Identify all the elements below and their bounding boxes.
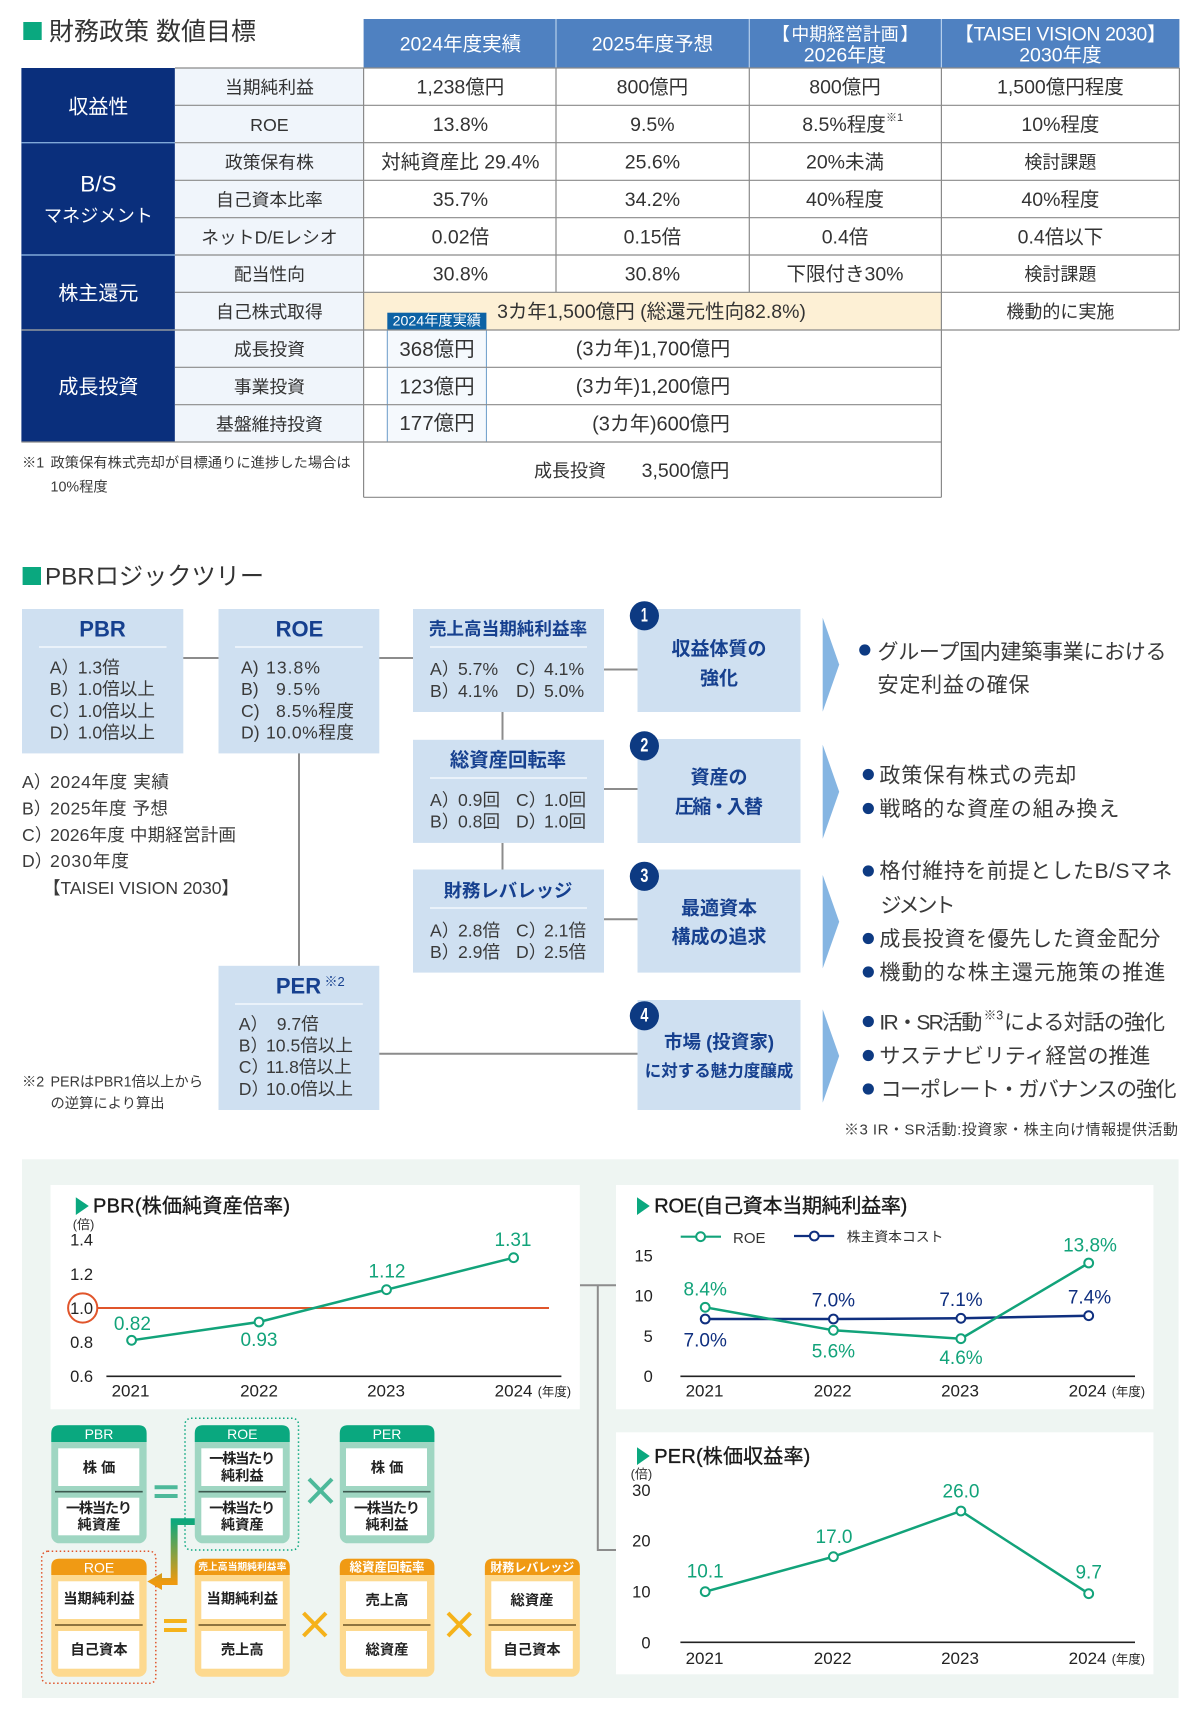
box: PER: B） bbox=[239, 1036, 268, 1056]
footnote ※2 bbox=[22, 1074, 203, 1112]
box: ROE: B) bbox=[241, 679, 259, 699]
table header: 【 bbox=[772, 24, 790, 44]
chart: PER: 17.0 bbox=[816, 1527, 852, 1548]
chart: PBR: 0.6 bbox=[70, 1368, 93, 1386]
legend: scenario key: 2024年度 実績 bbox=[50, 772, 169, 792]
chart: PER: (年度) bbox=[1112, 1652, 1145, 1667]
box: 総資産回転率 bbox=[413, 740, 604, 843]
arrow 1 bbox=[823, 618, 839, 712]
chart: ROE: 10 bbox=[634, 1288, 653, 1306]
footnote ※3: ※3 IR・SR活動:投資家・株主向け情報提供活動 bbox=[844, 1122, 1178, 1138]
formula card: 売上高当期純利益率 bbox=[195, 1559, 290, 1677]
box: PER: PER bbox=[276, 974, 321, 998]
box: 総資産回転率: D） bbox=[516, 812, 546, 832]
legend: scenario key: D） bbox=[22, 851, 52, 871]
box: ROE: 13.8% bbox=[266, 658, 320, 678]
box: 売上高当期純利益率: 4.1% bbox=[458, 681, 498, 701]
formula card: PER: 純利益 bbox=[366, 1516, 409, 1534]
table values: 3,500億円 bbox=[642, 460, 729, 482]
share buyback highlight cell bbox=[364, 292, 941, 330]
legend: scenario key: B） bbox=[22, 798, 51, 818]
box: PER: D） bbox=[239, 1079, 269, 1099]
table header: 2025年度予想 bbox=[592, 33, 713, 55]
chart: ROE: 2022 bbox=[814, 1382, 852, 1400]
chart: ROE: 7.0% bbox=[684, 1330, 727, 1352]
box: PBR: D） bbox=[50, 723, 80, 743]
table values: 20%未満 bbox=[806, 152, 884, 174]
table values: 10%程度 bbox=[1021, 114, 1099, 136]
formula card: 売上高当期純利益率: 売上高 bbox=[221, 1642, 264, 1658]
action box 2: 資産の bbox=[690, 766, 748, 788]
operator: times green bbox=[309, 1479, 332, 1502]
formula card: ROE (EPS / BPS): 純資産 bbox=[221, 1516, 264, 1534]
FY2024 actual investment column: 123億円 bbox=[399, 376, 475, 398]
table values: 1,500億円程度 bbox=[997, 77, 1124, 99]
table values: (3カ年)1,700億円 bbox=[576, 338, 730, 361]
table values: (3カ年)600億円 bbox=[592, 412, 730, 435]
table header: 2024年度実績 bbox=[400, 33, 521, 55]
table category column: 株主還元 bbox=[58, 282, 138, 305]
table category column: マネジメント bbox=[44, 206, 153, 226]
table values: 13.8% bbox=[433, 114, 488, 136]
box: PER: 9.7倍 bbox=[277, 1014, 319, 1034]
table metric labels bbox=[175, 68, 364, 442]
chart: PER bbox=[616, 1432, 1153, 1674]
chart: PBR: 0.93 bbox=[241, 1330, 277, 1351]
box: 売上高当期純利益率: C） bbox=[516, 659, 546, 679]
action box 3: 最適資本 bbox=[681, 897, 757, 919]
chart: PER: 10 bbox=[632, 1583, 650, 1601]
box: 総資産回転率: A） bbox=[430, 790, 459, 810]
box: PER: C） bbox=[239, 1057, 269, 1077]
chart: ROE: 0 bbox=[644, 1368, 653, 1386]
box: PBR: C） bbox=[50, 701, 80, 721]
legend: scenario key: C） bbox=[22, 825, 52, 845]
table values: 0.4倍 bbox=[822, 226, 868, 248]
legend: scenario key: 2025年度 予想 bbox=[50, 798, 168, 818]
box: 総資産回転率: 0.9回 bbox=[458, 790, 500, 810]
box: 財務レバレッジ: D） bbox=[516, 942, 546, 962]
legend: scenario key bbox=[22, 772, 239, 898]
box: 財務レバレッジ: 財務レバレッジ bbox=[444, 880, 572, 901]
chart: ROE: 15 bbox=[634, 1247, 653, 1265]
table header: 2026年度 bbox=[804, 44, 886, 66]
chart legend bbox=[681, 1230, 943, 1247]
box: 売上高当期純利益率: A） bbox=[430, 659, 459, 679]
table header: 【TAISEI VISION 2030】 bbox=[954, 23, 1166, 45]
box: 売上高当期純利益率: 5.0% bbox=[544, 681, 584, 701]
bullets: action 3: 格付維持を前提としたB/Sマネ bbox=[879, 860, 1172, 883]
box: 売上高当期純利益率: D） bbox=[516, 681, 546, 701]
table metric labels: ネットD/Eレシオ bbox=[201, 227, 338, 247]
chart: PBR: 1.31 bbox=[495, 1230, 531, 1251]
table metric labels: 自己資本比率 bbox=[216, 190, 323, 210]
box: ROE: A) bbox=[241, 658, 259, 678]
FY2024 actual investment column: 2024年度実績 bbox=[393, 314, 481, 330]
icon: number 3: 3 bbox=[640, 866, 648, 887]
table metric labels: 当期純利益 bbox=[225, 78, 314, 98]
box: PBR: PBR bbox=[79, 616, 126, 642]
chart: PBR: 1.2 bbox=[70, 1266, 93, 1284]
formula card: ROE (EPS / BPS): 一株当たり bbox=[209, 1450, 275, 1468]
bullets: action 3: 成長投資を優先した資金配分 bbox=[879, 928, 1160, 951]
icon: number 2: 2 bbox=[640, 736, 648, 756]
chart: ROE: 4.6% bbox=[939, 1348, 983, 1369]
box: PBR: 1.0倍以上 bbox=[78, 701, 155, 721]
formula card: ROE (EPS / BPS): 純利益 bbox=[221, 1466, 264, 1484]
tree connector lines bbox=[183, 658, 638, 1054]
table header: 中期経営計画 bbox=[791, 24, 899, 44]
bullets: action 3 bbox=[863, 860, 1172, 984]
formula card: 財務レバレッジ bbox=[485, 1559, 580, 1677]
table metric labels: 政策保有株 bbox=[225, 152, 314, 172]
formula card: ROE: 自己資本 bbox=[70, 1640, 128, 1658]
box: ROE: C) bbox=[241, 701, 260, 721]
table values: 機動的に実施 bbox=[1006, 302, 1114, 322]
box: 総資産回転率: B） bbox=[430, 812, 459, 832]
chart: PER: 0 bbox=[641, 1634, 650, 1652]
chart: ROE: ROE(自己資本当期純利益率) bbox=[654, 1195, 907, 1218]
table values: 25.6% bbox=[625, 152, 680, 174]
formula card: PBR: 一株当たり bbox=[66, 1499, 132, 1517]
chart connector lines bbox=[580, 1285, 616, 1550]
chart: ROE: 5 bbox=[644, 1328, 653, 1346]
formula card: 総資産回転率: 総資産回転率 bbox=[349, 1560, 425, 1574]
action box 4: に対する魅力度醸成 bbox=[645, 1061, 793, 1081]
table values: 40%程度 bbox=[806, 189, 884, 211]
table values: 30.8% bbox=[433, 264, 488, 286]
box: 売上高当期純利益率 bbox=[413, 609, 604, 712]
chart: PBR: 2021 bbox=[112, 1382, 149, 1400]
table values: 検討課題 bbox=[1024, 265, 1096, 285]
box: ROE: 9.5% bbox=[276, 679, 320, 699]
action box 2: 圧縮・入替 bbox=[675, 796, 763, 818]
table values: 35.7% bbox=[433, 189, 488, 211]
chart: PBR bbox=[50, 1185, 580, 1409]
table metric labels: 成長投資 bbox=[234, 340, 305, 360]
box: 売上高当期純利益率: 売上高当期純利益率 bbox=[429, 619, 587, 639]
action box 3: 構成の追求 bbox=[671, 925, 767, 948]
formula card: ROE bbox=[51, 1559, 147, 1677]
chart: PBR: 0.8 bbox=[70, 1334, 93, 1352]
chart: PER: 26.0 bbox=[943, 1482, 979, 1502]
box: ROE: D) bbox=[241, 723, 260, 743]
footnote ※1: 10%程度 bbox=[50, 479, 108, 496]
chart: PBR: (年度) bbox=[538, 1384, 571, 1399]
arrow 2 bbox=[823, 745, 839, 839]
action box 2 bbox=[630, 731, 800, 843]
operator: times orange 1 bbox=[304, 1613, 326, 1636]
formula card: ROE (EPS / BPS) bbox=[195, 1425, 290, 1543]
formula card: 総資産回転率 bbox=[340, 1559, 434, 1677]
table values: 800億円 bbox=[809, 77, 881, 99]
table grid lines bbox=[21, 68, 1179, 497]
dotted highlight: ROE top bbox=[185, 1418, 298, 1550]
bullets: action 1: 安定利益の確保 bbox=[878, 674, 1030, 697]
chart: PER: (倍) bbox=[631, 1466, 652, 1482]
table values: 0.4倍以下 bbox=[1018, 226, 1103, 248]
box: 総資産回転率: 総資産回転率 bbox=[450, 749, 566, 771]
formula card: PBR: 株 価 bbox=[83, 1460, 115, 1476]
box: 総資産回転率: 1.0回 bbox=[544, 812, 586, 832]
bullets: action 4: サステナビリティ経営の推進 bbox=[879, 1045, 1150, 1068]
operator: equals green bbox=[155, 1487, 178, 1496]
action box 3 bbox=[630, 862, 800, 973]
table values: 800億円 bbox=[617, 77, 688, 99]
legend: scenario key: 2030年度 bbox=[50, 851, 129, 871]
bullets: action 3: 機動的な株主還元施策の推進 bbox=[879, 961, 1165, 984]
box: 売上高当期純利益率: 4.1% bbox=[544, 659, 584, 679]
action box 1: 収益体質の bbox=[671, 638, 767, 660]
table values: 0.02倍 bbox=[432, 226, 489, 248]
legend: scenario key: 2026年度 中期経営計画 bbox=[50, 825, 236, 845]
box: ROE: 10.0%程度 bbox=[266, 723, 354, 743]
table values: 30.8% bbox=[625, 264, 680, 286]
box: 総資産回転率: C） bbox=[516, 790, 546, 810]
table values: 成長投資 bbox=[534, 461, 606, 481]
arrow 4 bbox=[823, 1009, 839, 1103]
chart: ROE: (年度) bbox=[1112, 1384, 1145, 1399]
table metric labels: 自己株式取得 bbox=[216, 302, 323, 322]
box: 財務レバレッジ: B） bbox=[430, 942, 459, 962]
chart: PBR: PBR(株価純資産倍率) bbox=[93, 1195, 290, 1218]
chart: PER: 2023 bbox=[941, 1649, 979, 1668]
footnote ※2: PERはPBR1倍以上から bbox=[50, 1074, 203, 1091]
formula card: 財務レバレッジ: 総資産 bbox=[511, 1591, 553, 1609]
table values: 1,238億円 bbox=[416, 77, 504, 99]
footnote ※2: ※2 bbox=[22, 1075, 44, 1091]
dotted highlight: ROE bottom bbox=[42, 1551, 156, 1683]
formula card: ROE: ROE bbox=[84, 1560, 114, 1576]
table values: 8.5%程度 bbox=[802, 114, 886, 136]
box: PBR bbox=[22, 609, 183, 753]
chart: ROE: 13.8% bbox=[1063, 1236, 1117, 1256]
formula card: ROE (EPS / BPS): ROE bbox=[227, 1426, 257, 1442]
panel: charts background bbox=[22, 1159, 1179, 1698]
box: PER: A） bbox=[239, 1014, 268, 1034]
bullets: action 4 bbox=[863, 1008, 1176, 1102]
formula card: ROE: 当期純利益 bbox=[63, 1590, 135, 1608]
panel: financial targets table bbox=[21, 19, 1179, 497]
box: ROE bbox=[218, 609, 379, 753]
chart: ROE: 7.4% bbox=[1068, 1288, 1111, 1308]
FY2024 actual investment column: 368億円 bbox=[399, 338, 475, 361]
box: 財務レバレッジ bbox=[413, 870, 604, 973]
formula card: PBR: PBR bbox=[85, 1426, 113, 1442]
formula card: ROE (EPS / BPS): 一株当たり bbox=[209, 1499, 275, 1517]
table metric labels: 基盤維持投資 bbox=[216, 414, 323, 434]
chart: PBR: 1.0 bbox=[70, 1300, 93, 1318]
box: 財務レバレッジ: 2.5倍 bbox=[544, 942, 586, 962]
table values: (3カ年)1,200億円 bbox=[576, 375, 730, 398]
box: PBR: 1.0倍以上 bbox=[78, 679, 155, 699]
action box 4: 市場 (投資家) bbox=[664, 1032, 774, 1052]
table values bbox=[381, 77, 1124, 482]
formula card: PBR bbox=[51, 1425, 147, 1543]
icon: number 2 bbox=[630, 731, 659, 761]
chart: PBR: 1.12 bbox=[369, 1262, 405, 1282]
formula card: 総資産回転率: 総資産 bbox=[366, 1640, 408, 1658]
chart: PER: PER(株価収益率) bbox=[654, 1445, 810, 1468]
bullets: action 1: グループ国内建築事業における bbox=[878, 641, 1166, 664]
legend: scenario key: 【TAISEI VISION 2030】 bbox=[43, 878, 239, 898]
icon: number 3 bbox=[630, 862, 659, 891]
chart: ROE: 7.1% bbox=[939, 1290, 983, 1311]
chart: PER: 10.1 bbox=[687, 1562, 724, 1582]
icon: number 1 bbox=[630, 601, 659, 630]
box: 売上高当期純利益率: B） bbox=[430, 681, 459, 701]
box: PER: 10.0倍以上 bbox=[266, 1079, 353, 1099]
box: PER: 10.5倍以上 bbox=[266, 1036, 353, 1056]
box: ROE: ROE bbox=[276, 616, 323, 642]
chart: PER: 30 bbox=[632, 1482, 650, 1500]
chart: PER: 2021 bbox=[686, 1649, 723, 1668]
table header bbox=[364, 19, 1179, 68]
table values: 検討課題 bbox=[1024, 152, 1096, 172]
table values: 34.2% bbox=[625, 189, 680, 211]
table category column: 成長投資 bbox=[58, 376, 138, 399]
chart: PBR: 2023 bbox=[367, 1382, 405, 1400]
formula card: PER: 株 価 bbox=[371, 1460, 403, 1476]
box: 財務レバレッジ: 2.1倍 bbox=[544, 920, 586, 940]
footnote ※2: の逆算により算出 bbox=[50, 1095, 165, 1112]
chart: PBR: 0.82 bbox=[114, 1314, 151, 1335]
operator: times orange 2 bbox=[448, 1613, 470, 1636]
bullets: action 4: IR・SR活動 bbox=[879, 1011, 982, 1034]
formula card: 財務レバレッジ: 財務レバレッジ bbox=[490, 1560, 574, 1574]
table category column bbox=[21, 68, 175, 442]
table category column: B/S bbox=[80, 172, 117, 196]
chart: PER: 2022 bbox=[814, 1649, 852, 1668]
table values: 9.5% bbox=[630, 114, 675, 136]
arrow: ROE decomposition bbox=[147, 1518, 195, 1590]
box: 財務レバレッジ: C） bbox=[516, 920, 546, 940]
chart: ROE: 5.6% bbox=[812, 1342, 855, 1362]
formula card: PER: 一株当たり bbox=[354, 1499, 420, 1517]
FY2024 actual investment column bbox=[387, 313, 486, 442]
chart: PER: 20 bbox=[632, 1533, 650, 1551]
table metric labels: 配当性向 bbox=[234, 265, 305, 285]
box: PER: 11.8倍以上 bbox=[266, 1057, 352, 1077]
box: PBR: B） bbox=[50, 679, 79, 699]
bullets: action 2: 政策保有株式の売却 bbox=[879, 764, 1076, 787]
chart: ROE: 2021 bbox=[686, 1382, 723, 1400]
bullets: action 1 bbox=[859, 641, 1166, 697]
box: PBR: A） bbox=[50, 658, 79, 678]
formula card: PER bbox=[340, 1425, 434, 1543]
chart legend: 株主資本コスト bbox=[847, 1230, 943, 1244]
chart: ROE: 2024 bbox=[1069, 1382, 1107, 1400]
box: PER: ※2 bbox=[324, 974, 345, 989]
box: PBR: 1.3倍 bbox=[78, 658, 120, 678]
box: 売上高当期純利益率: 5.7% bbox=[458, 659, 498, 679]
table category column: 収益性 bbox=[68, 96, 128, 119]
table header: 】 bbox=[900, 24, 918, 44]
bullets: action 4: ※3 bbox=[984, 1008, 1003, 1022]
table metric labels: 事業投資 bbox=[234, 377, 305, 397]
action box 4 bbox=[630, 1000, 800, 1110]
formula card: PER: PER bbox=[373, 1426, 401, 1442]
formula card: PBR: 純資産 bbox=[78, 1516, 120, 1534]
chart: ROE: 7.0% bbox=[812, 1290, 855, 1312]
icon: number 4: 4 bbox=[640, 1006, 649, 1026]
footnote ※1: 政策保有株式売却が目標通りに進捗した場合は bbox=[50, 455, 351, 472]
box: 財務レバレッジ: A） bbox=[430, 920, 459, 940]
icon: number 1: 1 bbox=[641, 606, 648, 626]
bullets: action 4: コーポレート・ガバナンスの強化 bbox=[880, 1078, 1176, 1102]
table values: ※1 bbox=[886, 112, 903, 124]
chart: PBR: 2024 bbox=[495, 1382, 533, 1400]
heading: 財務政策 数値目標: 財務政策 数値目標 bbox=[49, 18, 256, 46]
icon: number 4 bbox=[630, 1001, 659, 1030]
formula card: 売上高当期純利益率: 当期純利益 bbox=[207, 1590, 279, 1608]
chart: PER: 2024 bbox=[1069, 1649, 1107, 1668]
chart: ROE bbox=[616, 1185, 1153, 1409]
chart: PBR: 2022 bbox=[240, 1382, 278, 1400]
table header: 2030年度 bbox=[1019, 44, 1102, 66]
chart: ROE: 2023 bbox=[941, 1382, 979, 1400]
formula card: 総資産回転率: 売上高 bbox=[366, 1592, 408, 1609]
box: PER bbox=[218, 966, 379, 1110]
table values: 0.15倍 bbox=[624, 226, 681, 248]
formula card: 売上高当期純利益率: 売上高当期純利益率 bbox=[198, 1560, 287, 1573]
operator: equals orange bbox=[164, 1621, 187, 1630]
bullets: action 2 bbox=[863, 764, 1119, 821]
chart legend: ROE bbox=[733, 1230, 766, 1247]
box: 財務レバレッジ: 2.8倍 bbox=[458, 920, 500, 940]
heading: PBRロジックツリー: PBRロジックツリー bbox=[45, 564, 264, 590]
legend: scenario key: A） bbox=[22, 772, 51, 792]
arrow 3 bbox=[823, 875, 839, 968]
bullets: action 3: ジメント bbox=[880, 894, 956, 917]
box: 総資産回転率: 1.0回 bbox=[544, 790, 586, 810]
table values: 40%程度 bbox=[1021, 189, 1099, 211]
box: ROE: 8.5%程度 bbox=[276, 701, 354, 721]
chart: PBR: (倍) bbox=[73, 1217, 94, 1232]
chart: ROE: 8.4% bbox=[684, 1280, 727, 1300]
box: PBR: 1.0倍以上 bbox=[78, 723, 155, 743]
chart: PBR: 1.4 bbox=[70, 1231, 93, 1249]
table metric labels: ROE bbox=[250, 115, 289, 135]
share buyback highlight cell: 3カ年1,500億円 (総還元性向82.8%) bbox=[497, 301, 806, 323]
FY2024 actual investment column: 177億円 bbox=[399, 412, 475, 435]
formula card: 財務レバレッジ: 自己資本 bbox=[503, 1640, 561, 1658]
box: 総資産回転率: 0.8回 bbox=[458, 812, 500, 832]
footnote ※1 bbox=[22, 455, 351, 496]
bullets: action 4: による対話の強化 bbox=[1004, 1011, 1165, 1034]
table values: 対純資産比 29.4% bbox=[381, 152, 540, 174]
footnote ※1: ※1 bbox=[22, 456, 44, 472]
action box 1: 強化 bbox=[700, 667, 738, 689]
table values: 下限付き30% bbox=[786, 264, 904, 286]
chart: PER: 9.7 bbox=[1075, 1562, 1102, 1584]
bullets: action 2: 戦略的な資産の組み換え bbox=[879, 798, 1119, 821]
action box 1 bbox=[630, 601, 800, 712]
box: 財務レバレッジ: 2.9倍 bbox=[458, 942, 500, 962]
